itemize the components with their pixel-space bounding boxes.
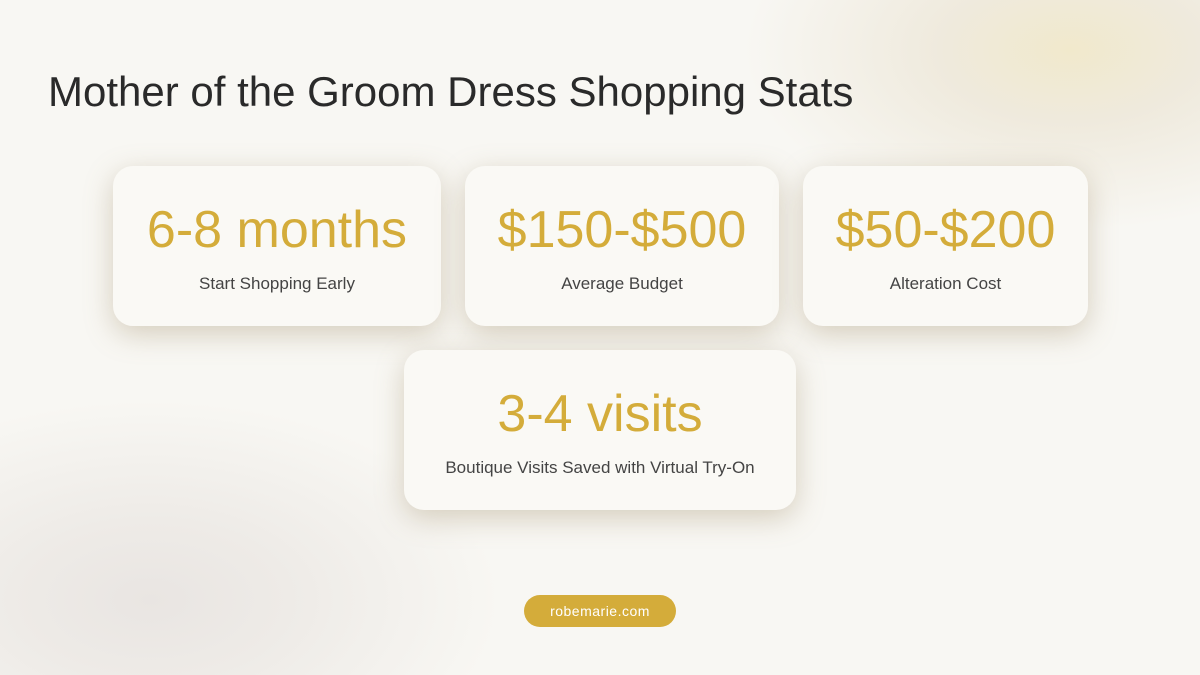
card: alteration: Alteration Cost [890,274,1001,293]
footer pill: robemarie.com [550,603,650,619]
card: visits: 3-4 visits [497,385,703,443]
card: budget: $150-$500 [498,201,746,259]
footer pill [524,595,676,627]
card: start shopping: Start Shopping Early [199,274,355,293]
title: Mother of the Groom Dress Shopping Stats [48,68,853,115]
card: budget [465,166,779,326]
card: alteration [803,166,1088,326]
card: visits: Boutique Visits Saved with Virtual Try-On [445,458,755,477]
card: alteration: $50-$200 [836,201,1055,259]
card: start shopping [113,166,441,326]
card: visits [404,350,796,510]
card: start shopping: 6-8 months [147,201,407,259]
card: budget: Average Budget [561,274,683,293]
